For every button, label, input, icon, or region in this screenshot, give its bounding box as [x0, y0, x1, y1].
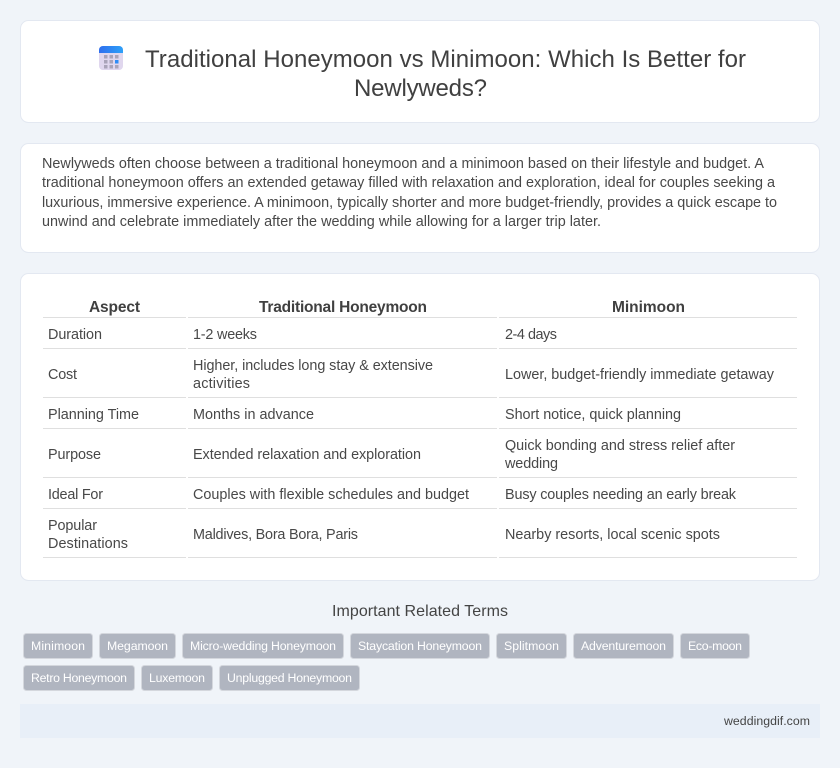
title: Newlyweds? — [354, 75, 487, 102]
row: cost: Cost — [48, 367, 77, 383]
row: popular destinations: Maldives, Bora Bora, Paris — [193, 527, 358, 543]
tag list: Retro Honeymoon — [31, 671, 127, 685]
row: planning time — [48, 407, 681, 423]
tag list: Unplugged Honeymoon — [227, 671, 352, 685]
row: planning time: Months in advance — [193, 407, 314, 423]
row: purpose: wedding — [504, 456, 558, 472]
tag list: Splitmoon — [504, 639, 559, 653]
row: purpose: Purpose — [48, 447, 101, 463]
intro text: luxurious, immersive experience. A minimoon, typically shorter and more budget-friendly, provides a quick escape to — [42, 195, 777, 211]
row: ideal for: Busy couples needing an early break — [505, 487, 737, 503]
tag list: Staycation Honeymoon — [358, 639, 482, 653]
row: ideal for: Ideal For — [48, 487, 103, 503]
row: ideal for: Couples with flexible schedules and budget — [193, 487, 469, 503]
title — [145, 46, 746, 102]
table header: Aspect — [89, 299, 140, 316]
row: purpose: Quick bonding and stress relief after — [505, 438, 735, 454]
tag list: Adventuremoon — [581, 639, 666, 653]
panel: comparison table — [20, 274, 820, 580]
row: planning time: Planning Time — [48, 407, 139, 423]
intro text: unwind and celebrate immediately after the wedding while allowing for a larger trip later. — [42, 214, 601, 230]
intro text: Newlyweds often choose between a traditional honeymoon and a minimoon based on their lifestyle and budget. A — [42, 156, 764, 172]
table header: Minimoon — [612, 299, 685, 316]
tag list — [24, 634, 750, 690]
table header — [89, 299, 685, 316]
row: purpose — [48, 438, 735, 472]
tag list: Micro-wedding Honeymoon — [190, 639, 336, 653]
footer: weddingdif.com — [723, 714, 810, 728]
heading: related terms: Important Related Terms — [332, 603, 508, 620]
title: Traditional Honeymoon vs Minimoon: Which Is Better for — [145, 46, 746, 73]
row: ideal for — [48, 487, 737, 503]
row: cost — [48, 358, 775, 392]
row: duration: 2-4 days — [505, 327, 557, 343]
row: planning time: Short notice, quick planning — [505, 407, 681, 423]
footer — [20, 704, 820, 738]
intro text — [42, 156, 777, 230]
row: cost: Lower, budget-friendly immediate getaway — [505, 367, 775, 383]
icon: calendar — [99, 46, 123, 70]
row: cost: activities — [193, 376, 250, 392]
tag list: Minimoon — [31, 639, 85, 653]
intro text: traditional honeymoon offers an extended getaway filled with relaxation and exploration, ideal for couples seeking a — [42, 175, 775, 191]
row: popular destinations: Popular — [48, 518, 97, 534]
row: cost: Higher, includes long stay & extensive — [193, 358, 433, 374]
row: duration: 1-2 weeks — [193, 327, 257, 343]
row: popular destinations: Nearby resorts, local scenic spots — [505, 527, 720, 543]
row: duration — [48, 327, 557, 343]
panel: title header — [20, 20, 820, 122]
row: popular destinations — [48, 518, 720, 552]
row: duration: Duration — [48, 327, 102, 343]
tag list: Luxemoon — [149, 671, 205, 685]
panel: introduction — [20, 144, 820, 252]
row: popular destinations: Destinations — [48, 536, 128, 552]
tag list: Eco-moon — [688, 639, 742, 653]
table header: Traditional Honeymoon — [259, 299, 427, 316]
row: purpose: Extended relaxation and exploration — [193, 447, 421, 463]
tag list: Megamoon — [107, 639, 168, 653]
